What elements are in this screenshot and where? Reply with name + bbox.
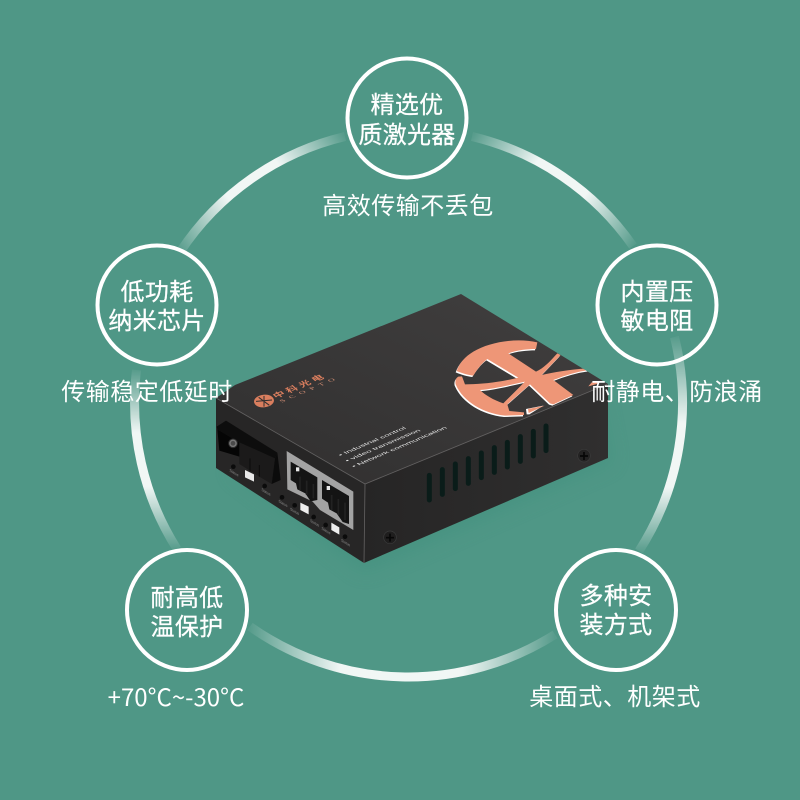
- circle badge: [348, 58, 466, 178]
- port plug seam: [250, 458, 259, 477]
- RJ45 ports: [287, 451, 353, 535]
- port frame: [287, 451, 353, 530]
- logo corner fragment: [588, 382, 600, 386]
- line 3: • Network communication: [350, 425, 449, 468]
- brand latin: SCOPTO: [278, 375, 342, 403]
- logo cross: [256, 396, 272, 407]
- socket contact shading: [300, 477, 345, 520]
- badge text: 内置压: [621, 279, 693, 306]
- port 1 indicator: [296, 467, 299, 471]
- screw left: [384, 531, 396, 544]
- feature: bottom left: [108, 550, 247, 713]
- arc: right: [639, 337, 683, 551]
- screw cross: [580, 452, 588, 460]
- lens core: [231, 441, 235, 446]
- arc: left: [135, 370, 177, 549]
- status LEDs: [231, 464, 347, 539]
- feature: right: [591, 246, 763, 406]
- P1 badge: [331, 523, 339, 535]
- port 1 socket: [291, 462, 317, 501]
- arc: top left: [180, 136, 345, 252]
- LED labels: Status: [229, 468, 239, 478]
- badge text line 2: 纳米芯片: [108, 308, 206, 335]
- fibre lens: [229, 439, 237, 448]
- brand name: 中科光电: [270, 371, 329, 400]
- front face: [216, 398, 365, 563]
- port body: [239, 442, 275, 484]
- port right plug: [272, 453, 281, 484]
- feature: left: [61, 246, 233, 406]
- small logo mark: [253, 394, 275, 408]
- caption: +70°C~-30°C: [108, 678, 244, 713]
- caption: 桌面式、机架式: [529, 684, 701, 711]
- line 2: • video transmission: [343, 428, 422, 463]
- logo circle: [253, 394, 275, 408]
- port 2 indicator: [327, 486, 330, 490]
- P2 badge: [300, 503, 309, 514]
- circle badge: [127, 550, 247, 670]
- arc: bottom: [250, 626, 555, 677]
- caption: 高效传输不丢包: [322, 193, 494, 220]
- screw cross: [386, 534, 394, 542]
- SC fibre port: [217, 421, 281, 484]
- ring arcs connecting circles: [135, 136, 683, 677]
- badge text line 2: 质激光器: [358, 122, 456, 149]
- LED labels: Status: [278, 499, 288, 508]
- ventilation slots: [429, 426, 546, 500]
- badge text line 2: 温保护: [151, 614, 223, 641]
- logo lower fragment highlight: [526, 406, 543, 414]
- feature: top: [322, 58, 494, 220]
- LED labels: [229, 468, 350, 548]
- badge text: 低功耗: [121, 279, 193, 306]
- logo emblem: [455, 340, 589, 416]
- port 2 socket: [322, 480, 349, 524]
- badge text line 2: 敏电阻: [621, 308, 693, 335]
- device shadow: [230, 400, 612, 572]
- LED labels: Status: [341, 538, 350, 548]
- LED labels: Status: [310, 519, 319, 528]
- caption: 传输稳定低延时: [61, 379, 233, 406]
- logo lower fragment: [528, 406, 545, 413]
- logo white highlight: [454, 342, 588, 417]
- top face: [216, 294, 608, 484]
- circle badge: [556, 550, 676, 670]
- port recess: [217, 429, 239, 457]
- side face: [364, 384, 608, 563]
- feature list on top face: [336, 425, 449, 468]
- badge text line 2: 装方式: [580, 612, 652, 639]
- screw recess: [578, 449, 590, 462]
- LED labels: Status: [321, 526, 331, 536]
- arc: top right: [472, 136, 633, 246]
- circle badge: [98, 246, 216, 364]
- feature: bottom right: [529, 550, 701, 711]
- LED labels: Status: [290, 507, 299, 516]
- badge text: 多种安: [580, 583, 652, 610]
- badge text: 耐高低: [151, 585, 223, 612]
- screw right: [578, 449, 590, 462]
- line 1: • Industrial control: [336, 426, 408, 457]
- edge highlights: [216, 384, 608, 563]
- infographic canvas: [62, 56, 760, 708]
- bidi label: [245, 470, 254, 482]
- port top strip: [217, 421, 277, 458]
- circle badge: [598, 246, 716, 364]
- LED labels: Status: [261, 488, 271, 497]
- screw recess: [384, 531, 396, 544]
- caption: 耐静电、防浪涌: [591, 379, 763, 406]
- product: media converter: [216, 294, 608, 563]
- badge text: 精选优: [371, 92, 443, 119]
- large orange logo on top face: [454, 340, 589, 417]
